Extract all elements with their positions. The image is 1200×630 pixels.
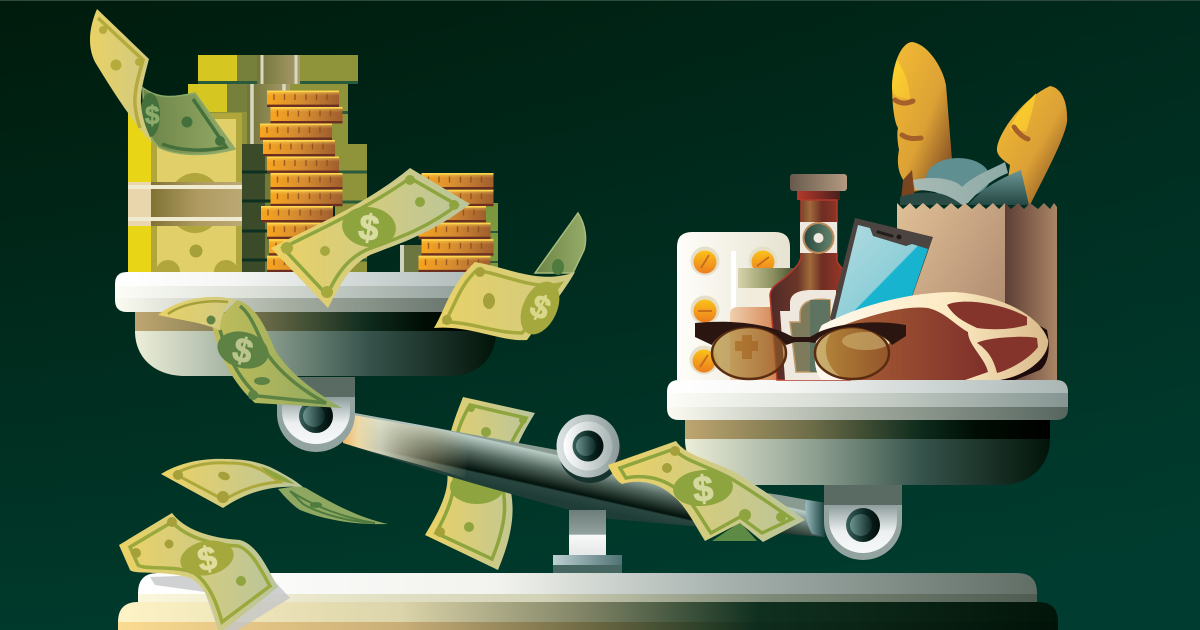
pill four [690, 346, 718, 374]
left pan plate [115, 272, 500, 312]
bill front, yellow [161, 459, 303, 508]
pill three [690, 296, 720, 324]
medicine bottle [730, 268, 797, 380]
coin stack: short [414, 173, 494, 272]
money stacks on left pan [128, 55, 498, 286]
bill back, green [278, 486, 388, 524]
stack: dark side bundles [242, 144, 498, 272]
bill back, green [212, 300, 342, 408]
bill: right of plate, folded [434, 213, 586, 341]
bill body: $ [194, 538, 220, 578]
steak lean [826, 302, 1038, 380]
lettuce [900, 158, 1029, 205]
coin stack: tall [260, 91, 342, 272]
paper bag [897, 203, 1057, 380]
pill one [690, 246, 720, 276]
bill: center large: $ [356, 206, 382, 249]
bill: folded top left [90, 9, 235, 154]
right scale pan [667, 380, 1068, 485]
bill front, yellow [158, 297, 237, 330]
bill: mid left [161, 459, 388, 524]
goods on right pan [677, 42, 1067, 380]
right pan bowl [685, 420, 1050, 485]
left scale pan [115, 272, 500, 376]
blister pack [677, 232, 790, 380]
balance beam [343, 413, 825, 537]
bill: bottom left [119, 513, 290, 630]
right bracket [824, 485, 902, 560]
ketchup neck label [800, 222, 837, 254]
ketchup main label [780, 290, 836, 380]
pill two [748, 246, 778, 276]
bill: over beam right [608, 441, 805, 542]
bill: center large [271, 168, 470, 308]
smartphone [830, 218, 933, 322]
bill shadow [150, 573, 290, 630]
base [118, 573, 1058, 630]
bill: over beam right: $ [691, 467, 715, 510]
bill back, green [140, 88, 235, 154]
stand [553, 510, 622, 573]
steak [815, 292, 1049, 380]
left bracket [277, 377, 355, 452]
bill: under left pan [158, 297, 342, 408]
stack: front bundle [128, 113, 242, 286]
bill front, yellow [90, 9, 152, 143]
bill: behind beam [425, 397, 535, 570]
baguette left [892, 42, 953, 200]
sunglasses [695, 322, 906, 379]
stack: second bundle [188, 84, 348, 144]
bill back, green: $ [229, 330, 257, 372]
bill body [119, 513, 278, 630]
pivot [556, 414, 621, 483]
baguette right [997, 86, 1067, 205]
right pan plate [667, 380, 1068, 420]
bill back, green: $ [145, 100, 160, 130]
left pan bowl [135, 312, 496, 376]
ketchup bottle [770, 174, 850, 380]
bill: right of plate, folded: $ [525, 287, 556, 327]
stack: top bundle [198, 55, 358, 84]
